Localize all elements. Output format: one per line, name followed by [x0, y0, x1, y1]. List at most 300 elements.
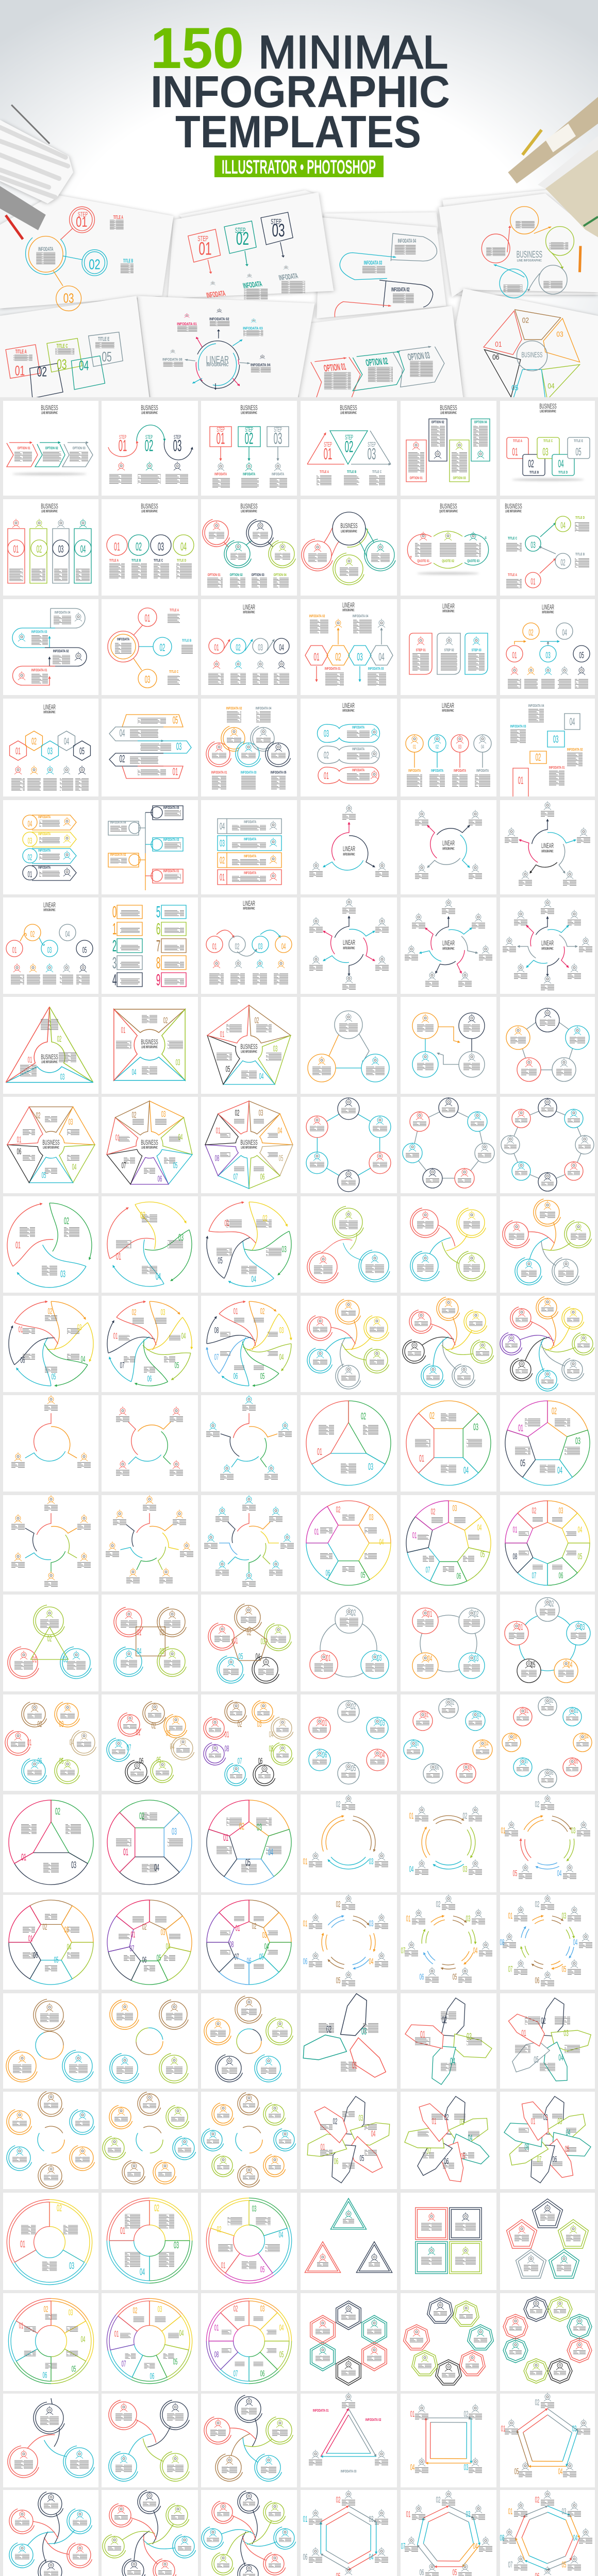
panel r10c3: spiral eight: 06: [234, 1371, 238, 1381]
panel r4c5: circles with stems: [401, 699, 496, 796]
panel r3c1: stadium flow: INFODATA 02: [53, 649, 69, 653]
sheet: hexagon hub: 05: [511, 383, 518, 392]
panel r7c3: pentagon hub: 02: [255, 1015, 259, 1025]
panel r14c6: lens circles eight: [500, 1694, 595, 1791]
panel r18c4: pinwheel six: 05: [360, 2153, 364, 2163]
panel r14c3: bubbles with inner octagon: 03: [257, 1719, 261, 1729]
panel r4c5: circles with stems: INFOGRAPHIC: [442, 709, 454, 713]
panel r13c6: lens circles five: 02: [550, 1598, 554, 1608]
panel r7c3: pentagon hub: 01: [220, 1029, 224, 1039]
panel r3c1: stadium flow: INFODATA 03: [31, 630, 47, 634]
panel r19c6: pentagon cards: [500, 2193, 595, 2290]
panel r4c6: rising stairs: 02: [536, 752, 541, 764]
panel r13c2: bubbles with inner square: [102, 1595, 198, 1691]
panel r4c3: infodata bubbles: [201, 699, 297, 796]
panel r20c3: donut eight: 02: [234, 2303, 238, 2314]
panel r7c3: pentagon hub: LINE INFOGRAPHIC: [241, 1050, 257, 1054]
panel r4c5: circles with stems: LINEAR: [442, 702, 454, 710]
panel r9c2: spiral four: 01: [116, 1252, 121, 1262]
panel r6c5: ring with seven arrows: [401, 897, 496, 994]
panel r3c5: three cards: STEP 02: [444, 648, 454, 652]
panel r2c5: three bumps: QUOTE INFOGRAPHIC: [439, 510, 458, 514]
panel r3c3: linear four circles: 02: [236, 642, 241, 653]
panel r16c5: double arrows seven: 07: [401, 1945, 405, 1956]
panel r16c3: circle with octagon: 03: [262, 1930, 267, 1940]
panel r11c1: option ring three: [3, 1395, 98, 1492]
panel r22c6: octagon arrows: 05: [562, 2560, 566, 2570]
panel r15c6: double arrows five: 04: [557, 1868, 561, 1878]
panel r1c1: option chevrons: LINE INFOGRAPHIC: [41, 411, 58, 415]
panel r10c3: spiral eight: 03: [279, 1325, 284, 1335]
panel r21c5: square arrows: [401, 2394, 496, 2487]
panel r2c2: chained circles: LINE INFOGRAPHIC: [141, 510, 158, 514]
panel r5c1: four pentagon bars: [3, 800, 98, 894]
panel r5c3: stacked step bars: INFODATA: [244, 854, 257, 858]
panel r2c1: four columns: 03: [58, 544, 64, 555]
panel r14c1: bubbles with inner hexagon: 02: [38, 1719, 42, 1729]
panel r16c1: circle with hexagon: 04: [67, 1942, 71, 1952]
sheet: linear ring: LINEAR: [206, 353, 229, 366]
panel r13c1: bubbles with inner triangle: [3, 1595, 98, 1691]
panel r9c2: spiral four: 03: [178, 1233, 184, 1243]
panel r8c3: octagon hub: LINE INFOGRAPHIC: [241, 1146, 257, 1150]
panel r18c5: pinwheel seven: 05: [461, 2151, 465, 2161]
panel r1c4: triangle steps: STEP: [368, 442, 376, 449]
panel r14c1: bubbles with inner hexagon: 05: [59, 1756, 63, 1766]
sheet: three steps: STEP: [197, 234, 208, 243]
panel r4c5: circles with stems: 04: [481, 743, 484, 750]
panel r16c3: circle with octagon: 02: [252, 1921, 256, 1931]
panel r3c2: hub with three steps: [102, 599, 198, 695]
panel r9c1: spiral three: 02: [64, 1216, 69, 1227]
panel r14c4: lens circles six: 04: [380, 1750, 385, 1760]
panel r4c4: stacked figure eights: 02: [324, 751, 329, 761]
sheet: stadium flow: INFODATA 03: [364, 260, 382, 266]
panel r1c5: stepped options: OPTION 03: [453, 476, 466, 480]
panel r17c4: pinwheel three: 03: [361, 2027, 367, 2037]
panel r13c5: lens circles four: [401, 1595, 496, 1691]
panel r14c4: lens circles six: 03: [380, 1718, 385, 1728]
panel r6c1: wave of circles: 02: [30, 929, 35, 939]
panel r18c4: pinwheel six: 01: [321, 2142, 325, 2152]
panel r1c5: stepped options: OPTION 02: [431, 420, 444, 425]
panel r2c5: three bumps: QUOTE 02: [442, 559, 454, 563]
panel r1c2: three arcs: STEP: [174, 434, 181, 440]
panel r1c3: step boxes: STEP: [274, 427, 282, 434]
panel r1c6: five title boxes: LINE INFOGRAPHIC: [540, 410, 556, 414]
panel r9c2: spiral four: 02: [140, 1211, 145, 1221]
badge: illustrator and photoshop: ILLUSTRATOR • PHOTOSHOP: [222, 157, 376, 178]
panel r12c6: segmented circle eight: 02: [532, 1505, 536, 1516]
panel r13c3: bubbles with inner pentagon: 03: [261, 1636, 265, 1647]
panel r7c3: pentagon hub: BUSINESS: [240, 1043, 258, 1051]
panel r13c4: lens circles three: 01: [326, 1653, 330, 1663]
panel r8c3: octagon hub: 01: [216, 1125, 220, 1136]
sheet: hub and steps: INFODATA: [38, 246, 54, 252]
panel r11c6: segmented circle five: [490, 1392, 598, 1501]
panel r13c6: lens circles five: [500, 1595, 595, 1691]
sheet: three steps: 01: [198, 239, 212, 259]
panel r22c4: hexagon arrows: 01: [303, 2514, 307, 2524]
sheet: option chevrons: [311, 347, 444, 400]
hero mockup sheets: TITLE B: [123, 258, 133, 264]
panel r1c6: five title boxes: 05: [575, 446, 582, 458]
panel r18c6: pinwheel eight: [500, 2092, 595, 2189]
panel r4c4: stacked figure eights: INFODATA: [352, 747, 365, 751]
panel r16c2: circle with heptagon: 06: [142, 1955, 146, 1965]
panel r1c5: stepped options: [401, 401, 496, 496]
panel r14c3: bubbles with inner octagon: 05: [269, 1743, 273, 1754]
hero mockup sheets: INFODATA: [278, 272, 299, 282]
panel r14c5: lens circles seven: 04: [485, 1741, 489, 1748]
panel r1c1: option chevrons: OPTION 03: [73, 446, 86, 450]
panel r16c4: double arrows six: 02: [336, 1899, 340, 1909]
panel r8c3: octagon hub: BUSINESS: [240, 1139, 258, 1147]
panel r1c4: triangle steps: LINE INFOGRAPHIC: [340, 411, 357, 415]
panel r18c5: pinwheel seven: [401, 2092, 496, 2189]
panel r4c2: banner hexagon: [102, 699, 198, 796]
panel r8c1: hexagon hub: BUSINESS: [42, 1139, 60, 1147]
panel r7c2: square hub: 02: [163, 1015, 168, 1025]
panel r7c2: square hub: 04: [132, 1067, 136, 1077]
panel r16c4: double arrows six: [301, 1894, 397, 1990]
panel r1c4: triangle steps: [301, 401, 397, 496]
panel r1c1: option chevrons: BUSINESS: [41, 404, 58, 412]
panel r20c3: donut eight: 08: [214, 2349, 219, 2360]
panel r8c4: six bubbles: [301, 1097, 397, 1193]
panel r1c4: triangle steps: 01: [324, 446, 332, 463]
panel r11c4: segmented circle three: [291, 1395, 397, 1501]
panel r14c3: bubbles with inner octagon: 04: [269, 1729, 273, 1739]
panel r3c4: hexagon steps: 03: [357, 651, 363, 663]
panel r22c6: octagon arrows: 04: [573, 2533, 577, 2543]
panel r3c3: linear four circles: [201, 599, 297, 695]
panel r3c6: five steps: [500, 599, 595, 695]
panel r6c3: four linked circles: 02: [235, 941, 239, 952]
panel r13c6: lens circles five: 01: [519, 1622, 523, 1632]
panel r5c3: stacked step bars: INFODATA: [244, 871, 257, 875]
panel r8c2: heptagon hub: [99, 1091, 205, 1199]
panel r4c6: rising stairs: 04: [570, 717, 575, 728]
sheet: title boxes: 05: [102, 349, 112, 365]
panel r6c1: wave of circles: [3, 897, 98, 994]
panel r7c1: triangle hub: 02: [57, 1033, 61, 1044]
panel r22c4: hexagon arrows: [301, 2490, 397, 2576]
panel r16c6: double arrows eight: 08: [500, 1937, 504, 1947]
panel r1c6: five title boxes: TITLE D: [558, 470, 568, 474]
panel r8c1: hexagon hub: 03: [69, 1116, 73, 1127]
panel r3c4: hexagon steps: 04: [378, 651, 385, 663]
panel r16c3: circle with octagon: 04: [264, 1941, 269, 1952]
panel r14c1: bubbles with inner hexagon: 01: [27, 1737, 31, 1748]
panel r16c2: circle with heptagon: 01: [131, 1929, 135, 1940]
panel r19c1: donut three: 01: [20, 2240, 25, 2250]
panel r21c6: pentagon arrows: [500, 2393, 595, 2487]
panel r6c1: wave of circles: LINEAR: [43, 901, 56, 909]
panel r2c2: chained circles: BUSINESS: [141, 502, 158, 511]
panel r5c5: ring with four arrows: [401, 800, 496, 894]
panel r2c2: chained circles: [102, 499, 198, 596]
panel r3c4: hexagon steps: INFODATA 04: [353, 614, 369, 618]
sheet: three steps: 02: [236, 228, 249, 249]
panel r16c6: double arrows eight: 05: [562, 1964, 566, 1974]
panel r10c1: spiral six: 02: [48, 1306, 52, 1316]
panel r15c3: circle with pentagon: 04: [268, 1848, 273, 1858]
panel r8c2: heptagon hub: BUSINESS: [141, 1139, 158, 1147]
panel r15c1: circle with triangle: 01: [21, 1853, 26, 1863]
sheet: business loop: LINE INFOGRAPHIC: [517, 258, 542, 262]
panel r10c2: spiral seven: 04: [181, 1331, 186, 1341]
panel r22c4: hexagon arrows: 06: [303, 2552, 307, 2562]
panel r17c5: pinwheel four: 02: [442, 2015, 447, 2026]
panel r22c1: swirl six: [3, 2487, 98, 2576]
panel r2c2: chained circles: 01: [114, 540, 120, 553]
panel r1c6: five title boxes: 04: [558, 457, 564, 470]
panel r1c1: option chevrons: [3, 401, 98, 496]
panel r18c6: pinwheel eight: 08: [525, 2142, 529, 2152]
panel r1c2: three arcs: STEP: [119, 434, 126, 440]
panel r4c5: circles with stems: 02: [436, 743, 439, 750]
panel r3c4: hexagon steps: INFODATA 03: [368, 667, 384, 671]
panel r22c6: octagon arrows: 03: [562, 2506, 566, 2516]
panel r6c3: four linked circles: INFOGRAPHIC: [243, 907, 255, 911]
panel r3c1: stadium flow: [3, 599, 98, 695]
panel r20c1: donut six: 01: [19, 2320, 23, 2331]
panel r13c1: bubbles with inner triangle: 03: [63, 1654, 68, 1665]
panel r16c5: double arrows seven: 03: [466, 1913, 470, 1924]
panel r18c3: ring hub eight bubbles: [198, 2089, 300, 2190]
panel r11c4: segmented circle three: 01: [317, 1447, 322, 1458]
panel r19c2: donut four: 01: [120, 2226, 125, 2236]
panel r16c6: double arrows eight: 02: [535, 1899, 539, 1909]
panel r6c4: ring with six arrows: INFOGRAPHIC: [343, 946, 355, 951]
panel r2c6: rising circles: 03: [530, 540, 536, 550]
panel r4c4: stacked figure eights: 03: [324, 729, 329, 739]
panel r10c2: spiral seven: 07: [120, 1360, 124, 1370]
panel r15c4: double arrows three: 01: [303, 1856, 307, 1867]
panel r4c2: banner hexagon: 04: [120, 728, 125, 739]
panel r17c5: pinwheel four: [401, 1993, 496, 2089]
panel r20c1: donut six: 03: [69, 2307, 73, 2317]
panel r2c3: zigzag circles: BUSINESS: [240, 502, 258, 511]
panel r5c4: ring with three arrows: INFOGRAPHIC: [343, 853, 355, 857]
panel r3c5: three cards: STEP 03: [472, 648, 481, 652]
panel r21c6: pentagon arrows: 05: [514, 2466, 519, 2477]
panel r14c4: lens circles six: 01: [323, 1718, 327, 1728]
panel r3c6: five steps: 03: [545, 650, 551, 660]
panel r15c5: double arrows four: 01: [409, 1810, 413, 1821]
panel r10c3: spiral eight: 02: [260, 1306, 264, 1316]
panel r14c3: bubbles with inner octagon: 06: [258, 1756, 262, 1766]
panel r12c4: segmented circle six: 01: [314, 1527, 319, 1537]
panel r21c4: triangle arrows: INFODATA 02: [366, 2418, 381, 2422]
panel r4c3: infodata bubbles: INFODATA 04: [256, 706, 272, 710]
panel r4c2: banner hexagon: 01: [173, 767, 178, 778]
panel r1c3: step boxes: 02: [245, 430, 253, 448]
panel r2c2: chained circles: 02: [136, 540, 142, 553]
panel r4c6: rising stairs: 01: [518, 775, 523, 787]
panel r20c3: donut eight: 04: [279, 2323, 284, 2333]
panel r15c2: circle with square: 01: [123, 1848, 128, 1858]
panel r13c1: bubbles with inner triangle: 01: [32, 1654, 37, 1665]
panel r4c4: stacked figure eights: INFOGRAPHIC: [343, 709, 355, 713]
panel r22c6: octagon arrows: 01: [508, 2506, 512, 2516]
panel r6c1: wave of circles: 01: [12, 945, 16, 955]
panel r18c6: pinwheel eight: 05: [565, 2144, 569, 2154]
panel r14c4: lens circles six: 06: [323, 1750, 327, 1760]
panel r7c1: triangle hub: 01: [28, 1055, 32, 1065]
panel r15c2: circle with square: 04: [154, 1863, 159, 1873]
panel r14c2: bubbles with inner heptagon: 02: [152, 1720, 156, 1731]
panel r10c5: swirl seven bubbles: [400, 1294, 497, 1392]
panel r2c6: rising circles: 04: [560, 520, 566, 531]
panel r16c2: circle with heptagon: 07: [130, 1943, 134, 1954]
panel r15c1: circle with triangle: 03: [71, 1860, 76, 1871]
panel r20c2: donut seven: 02: [133, 2305, 137, 2315]
panel r11c2: option ring four: [102, 1395, 198, 1492]
panel r20c1: donut six: 04: [81, 2334, 85, 2344]
panel r9c1: spiral three: 01: [15, 1241, 21, 1251]
sheet: linear ring: INFOGRAPHIC: [206, 363, 228, 367]
panel r6c2: ten digit boxes: 2: [112, 938, 117, 955]
panel r20c4: hexagon cards: [301, 2293, 397, 2391]
sheet: hexagon hub: 03: [556, 330, 563, 338]
panel r3c4: hexagon steps: LINEAR: [342, 601, 355, 609]
panel r10c2: spiral seven: 06: [147, 1374, 152, 1384]
panel r1c5: stepped options: LINE INFOGRAPHIC: [440, 411, 457, 415]
panel r13c3: bubbles with inner pentagon: 02: [247, 1627, 251, 1637]
panel r4c1: hexagon honeycomb: LINEAR: [43, 703, 56, 711]
panel r3c2: hub with three steps: 02: [160, 642, 165, 654]
panel r3c3: linear four circles: 01: [214, 642, 219, 653]
panel r19c3: donut five: 02: [217, 2224, 221, 2234]
panel r14c5: lens circles seven: 05: [469, 1765, 472, 1772]
panel r2c6: rising circles: TITLE A: [508, 573, 518, 577]
panel r2c6: rising circles: [500, 499, 595, 596]
panel r20c6: octagon cards: [500, 2293, 595, 2391]
panel r16c5: double arrows seven: 04: [473, 1945, 477, 1956]
sheet: linear ring: INFODATA 02: [209, 317, 229, 321]
sheet: hexagon hub: 01: [495, 340, 502, 348]
panel r14c1: bubbles with inner hexagon: [2, 1694, 101, 1791]
panel r16c2: circle with heptagon: 03: [161, 1927, 165, 1937]
panel r1c3: step boxes: LINE INFOGRAPHIC: [241, 411, 257, 415]
panel r3c2: hub with three steps: 03: [145, 674, 151, 686]
panel r16c6: double arrows eight: [500, 1894, 595, 1990]
panel r8c2: heptagon hub: 03: [161, 1109, 165, 1119]
panel r10c3: spiral eight: 07: [214, 1352, 219, 1362]
panel r14c1: bubbles with inner hexagon: 04: [70, 1737, 74, 1748]
panel r22c6: octagon arrows: 07: [508, 2560, 512, 2570]
panel r21c5: square arrows: 03: [464, 2462, 468, 2472]
panel r4c4: stacked figure eights: LINEAR: [342, 702, 355, 710]
panel r3c2: hub with three steps: TITLE B: [182, 639, 192, 643]
panel r15c5: double arrows four: 02: [463, 1810, 467, 1821]
panel r12c1: option ring six: [3, 1495, 98, 1591]
panel r1c2: three arcs: BUSINESS: [141, 404, 158, 412]
sheet: linear ring: INFODATA 04: [251, 363, 271, 367]
panel r2c3: zigzag circles: OPTION 03: [252, 573, 264, 577]
panel r7c2: square hub: 01: [121, 1025, 125, 1035]
panel r17c6: pinwheel five: 04: [558, 2053, 563, 2063]
panel r9c5: swirl four bubbles: [401, 1196, 496, 1293]
panel r9c3: spiral five: 05: [218, 1256, 223, 1266]
panel r22c5: heptagon arrows: 01: [406, 2509, 410, 2519]
panel r18c6: pinwheel eight: 06: [553, 2154, 557, 2164]
panel r10c6: swirl eight bubbles: [497, 1293, 598, 1394]
sheet: hexagon hub: 04: [547, 382, 555, 390]
panel r7c2: square hub: [78, 974, 221, 1116]
panel r3c4: hexagon steps: INFODATA 01: [325, 667, 341, 671]
panel r2c2: chained circles: TITLE D: [177, 558, 187, 563]
panel r6c2: ten digit boxes: 9: [156, 972, 160, 989]
panel r5c3: stacked step bars: 04: [220, 822, 225, 832]
panel r1c4: triangle steps: TITLE B: [347, 470, 357, 474]
panel r20c2: donut seven: 07: [122, 2359, 126, 2369]
panel r4c4: stacked figure eights: INFODATA: [352, 725, 365, 730]
panel r6c6: ring with eight arrows: LINEAR: [541, 939, 554, 947]
panel r20c2: donut seven: 05: [173, 2357, 177, 2367]
panel r4c5: circles with stems: INFODATA: [476, 769, 489, 773]
panel r3c4: hexagon steps: 01: [313, 651, 320, 663]
hero mockup sheets: OPTION 03: [407, 350, 431, 363]
panel r15c1: circle with triangle: [0, 1794, 98, 1900]
panel r14c6: lens circles eight: 06: [550, 1770, 554, 1777]
panel r10c3: spiral eight: [200, 1295, 298, 1393]
panel r18c4: pinwheel six: 04: [371, 2128, 375, 2139]
panel r6c2: ten digit boxes: 6: [156, 921, 160, 938]
panel r5c2: timeline tree: INFODATA 01: [163, 869, 179, 873]
panel r3c5: three cards: INFOGRAPHIC: [443, 609, 455, 614]
sheet: three steps: 03: [272, 220, 285, 241]
panel r1c1: option chevrons: OPTION 01: [18, 446, 30, 450]
panel r5c6: ring with five arrows: INFOGRAPHIC: [542, 850, 554, 854]
panel r14c1: bubbles with inner hexagon: 03: [59, 1719, 63, 1729]
panel r1c6: five title boxes: 02: [528, 457, 534, 470]
panel r14c2: bubbles with inner heptagon: 03: [166, 1728, 170, 1738]
panel r16c2: circle with heptagon: [101, 1890, 203, 1995]
panel r22c4: hexagon arrows: 03: [369, 2514, 373, 2524]
panel r3c3: linear four circles: 04: [279, 642, 284, 653]
panel r12c6: segmented circle eight: 06: [559, 1570, 563, 1581]
panel r1c4: triangle steps: STEP: [345, 434, 353, 442]
panel r14c4: lens circles six: 05: [352, 1763, 356, 1773]
panel r12c6: segmented circle eight: 05: [578, 1551, 582, 1562]
panel r14c6: lens circles eight: 01: [525, 1708, 528, 1715]
panel r18c4: pinwheel six: [301, 2092, 397, 2189]
panel r14c4: lens circles six: [301, 1694, 397, 1791]
sheet: stadium flow: [335, 233, 437, 317]
panel r22c5: heptagon arrows: 07: [401, 2541, 405, 2551]
panel r6c2: ten digit boxes: 4: [112, 972, 117, 989]
panel r19c2: donut four: [102, 2193, 198, 2290]
panel r10c1: spiral six: [0, 1293, 105, 1395]
panel r4c6: rising stairs: [500, 699, 595, 796]
panel r10c1: spiral six: 06: [21, 1355, 25, 1365]
panel r1c6: five title boxes: BUSINESS: [539, 402, 557, 411]
panel r15c3: circle with pentagon: 05: [245, 1858, 251, 1868]
panel r2c6: rising circles: LINE INFOGRAPHIC: [505, 510, 522, 514]
panel r4c5: circles with stems: INFODATA: [454, 769, 467, 773]
panel r18c6: pinwheel eight: 02: [543, 2112, 547, 2122]
panel r20c3: donut eight: 01: [214, 2323, 219, 2333]
panel r4c3: infodata bubbles: INFODATA 02: [226, 706, 242, 710]
panel r15c6: double arrows five: 05: [513, 1868, 517, 1878]
sheet: three steps: INFODATA: [242, 279, 263, 290]
panel r8c3: octagon hub: 06: [260, 1172, 264, 1182]
panel r3c4: hexagon steps: 02: [335, 651, 341, 663]
panel r2c5: three bumps: QUOTE 01: [417, 559, 429, 563]
